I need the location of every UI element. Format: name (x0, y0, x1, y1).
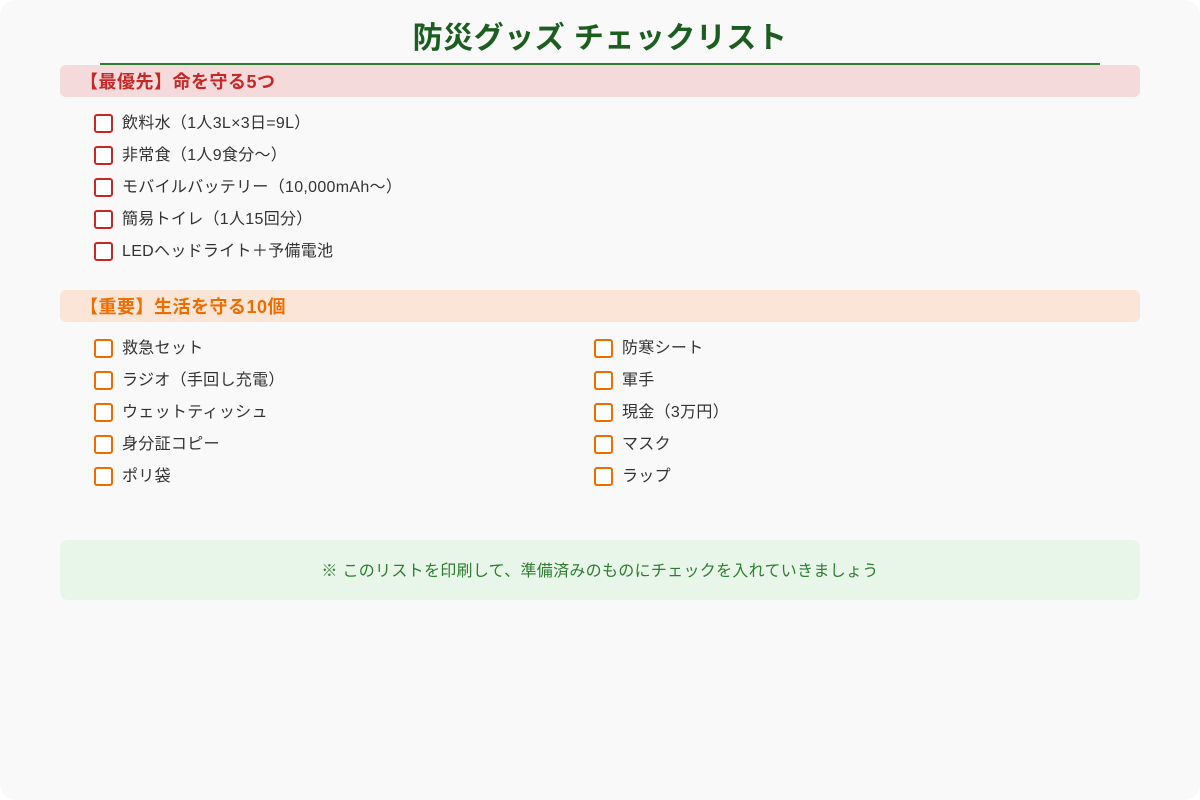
item: LEDヘッドライト＋予備電池 (122, 243, 333, 260)
item (94, 339, 204, 358)
item: 非常食（1人9食分〜） (122, 147, 287, 164)
item (94, 435, 220, 454)
section header: top priority (60, 65, 1140, 97)
item: 身分証コピー (122, 436, 220, 453)
item: 軍手 (622, 372, 655, 389)
item (594, 467, 671, 486)
item (594, 339, 704, 358)
section header: top priority: 【最優先】命を守る5つ (80, 72, 276, 92)
item: 飲料水（1人3L×3日=9L） (122, 115, 311, 132)
footer note: ※ このリストを印刷して、準備済みのものにチェックを入れていきましょう (321, 563, 879, 580)
section header: important (60, 290, 1140, 322)
item (94, 467, 171, 486)
item: モバイルバッテリー（10,000mAh〜） (122, 179, 402, 196)
title: 防災グッズ チェックリスト (413, 22, 787, 55)
item: ポリ袋 (122, 468, 171, 485)
item: 防寒シート (622, 340, 704, 357)
item: 救急セット (122, 340, 204, 357)
footer note (60, 540, 1140, 600)
section header: important: 【重要】生活を守る10個 (80, 297, 286, 317)
item (594, 371, 655, 390)
item: 現金（3万円） (622, 404, 729, 421)
list: important items (94, 339, 729, 486)
item: ラップ (622, 468, 671, 485)
item: 簡易トイレ（1人15回分） (122, 211, 313, 228)
item (594, 435, 671, 454)
item: マスク (622, 436, 671, 453)
list: top priority items (94, 114, 402, 261)
item: ウェットティッシュ (122, 404, 268, 421)
item: ラジオ（手回し充電） (122, 372, 285, 389)
